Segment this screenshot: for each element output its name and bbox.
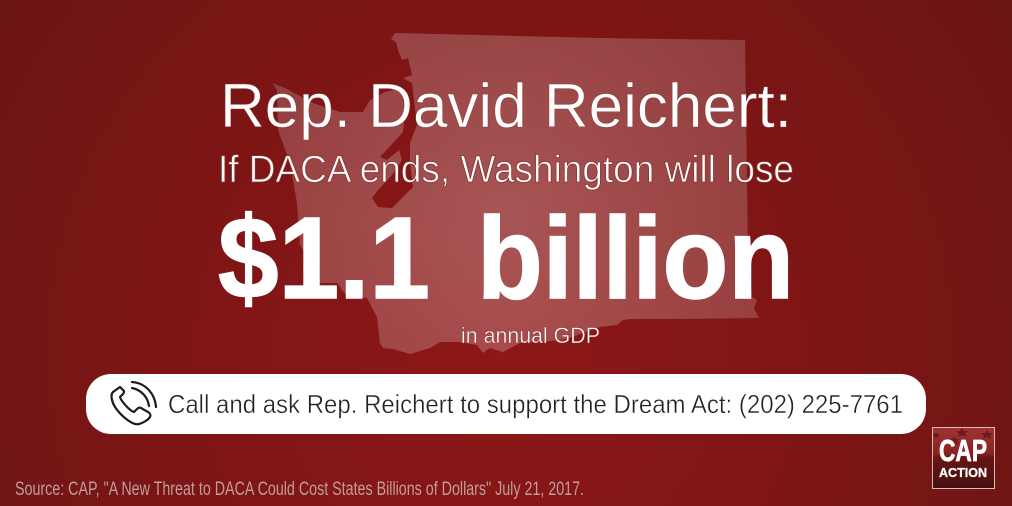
big number	[218, 193, 794, 323]
logo: CAP Action	[932, 428, 994, 488]
source note: Source: CAP, "A New Threat to DACA Could Cost States Billions of Dollars" July 21, 2017.	[15, 479, 584, 500]
title: Rep. David Reichert:	[220, 72, 792, 141]
amount: $1.1	[218, 193, 430, 323]
call to action text: Call and ask Rep. Reichert to support the Dream Act: (202) 225-7761	[168, 389, 903, 419]
unit: billion	[477, 193, 794, 323]
caption: in annual GDP: in annual GDP	[461, 323, 600, 348]
logo box	[932, 428, 994, 488]
pill background	[86, 374, 926, 434]
icon: phone	[112, 382, 156, 424]
call to action bar	[86, 374, 926, 434]
logo wordmark: ACTION: ACTION	[939, 465, 987, 480]
map: Washington state silhouette	[272, 33, 759, 354]
logo wordmark: CAP: CAP	[939, 433, 987, 468]
logo stars	[933, 428, 993, 445]
subtitle: If DACA ends, Washington will lose	[218, 149, 794, 191]
